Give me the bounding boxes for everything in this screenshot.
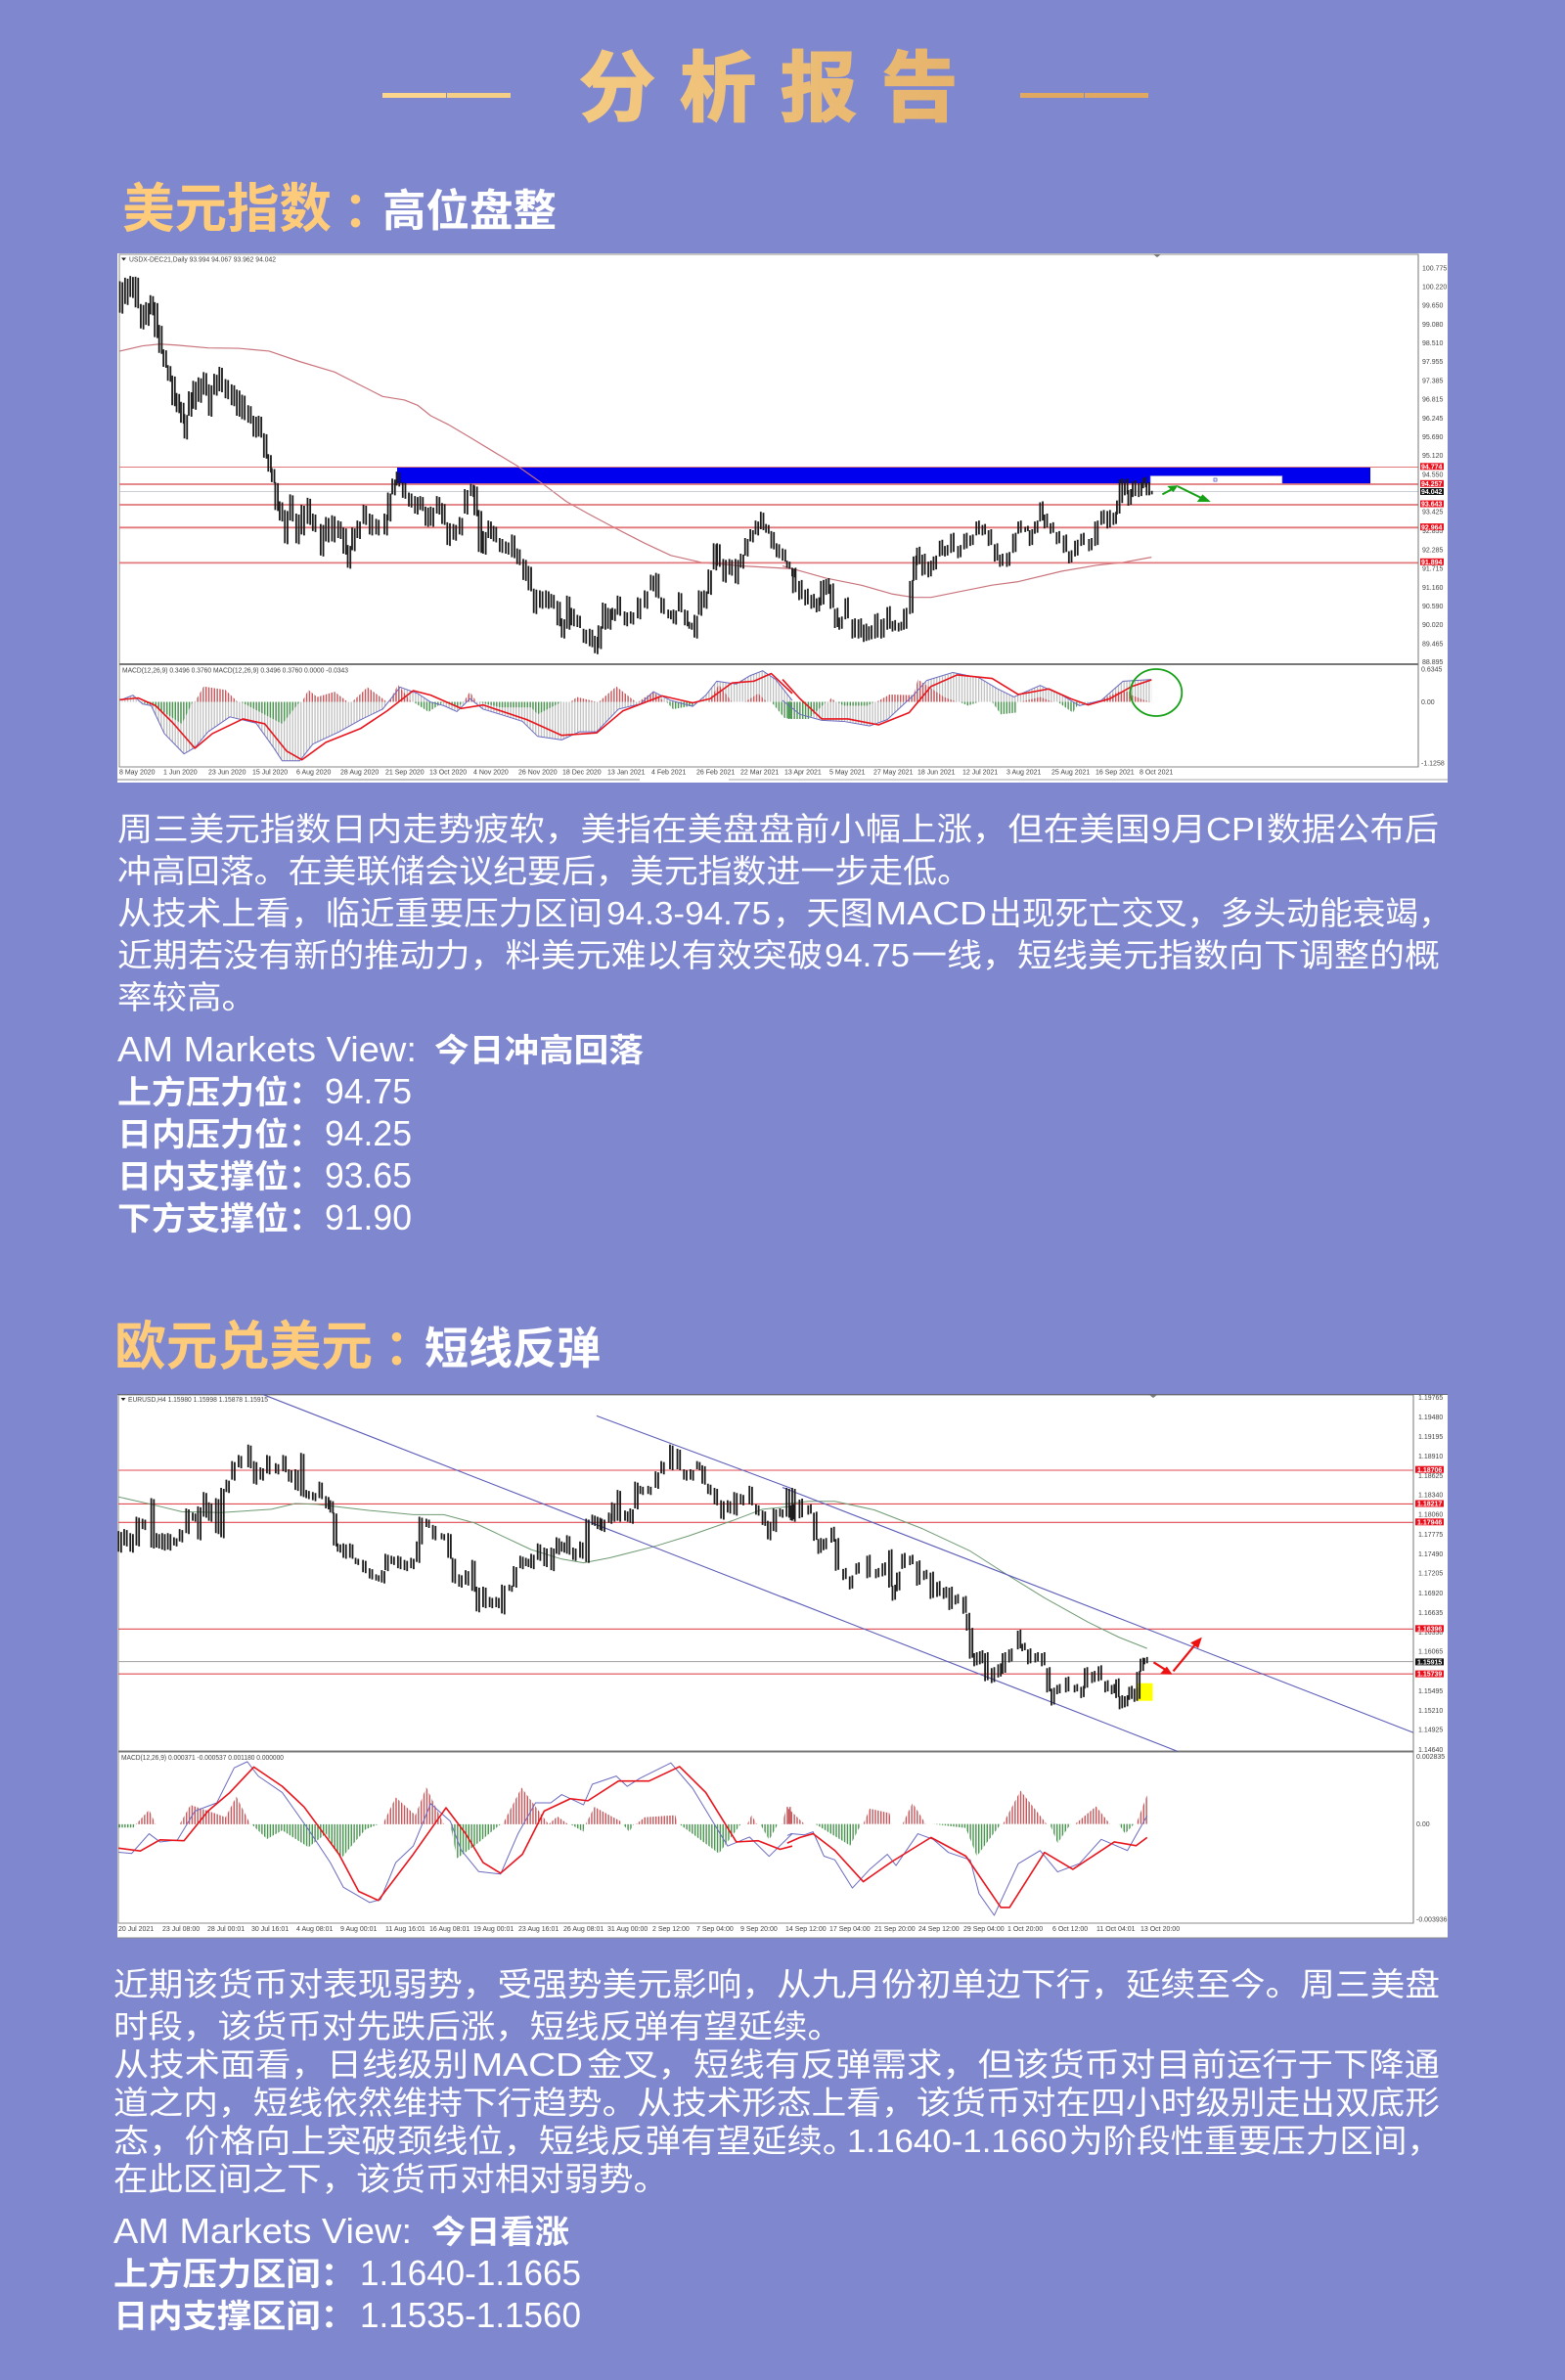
horizontal levels (118, 1470, 1413, 1674)
date axis: 3 Aug 2021 (1006, 769, 1042, 777)
date axis (117, 769, 1448, 780)
price axis: 1.18217 (1417, 1502, 1442, 1508)
price axis: 94.550 (1422, 472, 1444, 479)
text block: EURUSD analysis: 从技术面看，日线级别 (113, 2046, 469, 2083)
text block: EURUSD analysis (113, 1966, 1441, 2197)
text block: USDX view and levels: 日内压力位： (117, 1116, 323, 1152)
date axis: 12 Jul 2021 (962, 769, 998, 777)
price axis: 88.895 (1422, 659, 1444, 666)
text block: USDX view and levels: 93.65 (325, 1155, 412, 1195)
heading: 美元指数: 高位盘整 (382, 186, 557, 236)
price axis (1418, 254, 1447, 767)
price axis: 1.16396 (1417, 1626, 1442, 1633)
chart header text: EURUSD,H4 1.15980 1.15998 1.15878 1.15915 (128, 1397, 268, 1404)
date axis: 8 Oct 2021 (1140, 769, 1173, 777)
text block: EURUSD view and levels: AM Markets View: (113, 2211, 412, 2251)
moving average (119, 344, 1151, 598)
text block: USDX analysis: 94.3-94.75 (606, 895, 771, 931)
moving average (118, 1497, 1147, 1648)
date axis: 17 Sep 04:00 (829, 1926, 871, 1933)
title: 分析报告 (579, 45, 982, 131)
date axis: 11 Oct 04:01 (1096, 1926, 1136, 1933)
price axis: 1.18706 (1417, 1467, 1442, 1474)
date axis: 21 Sep 20:00 (874, 1926, 916, 1933)
price axis: 1.17490 (1418, 1551, 1443, 1558)
candlesticks (119, 276, 1152, 654)
price axis: 91.894 (1421, 560, 1443, 566)
date axis: 2 Sep 12:00 (652, 1926, 690, 1933)
date axis (118, 1926, 1180, 1933)
price axis: 1.17946 (1417, 1519, 1442, 1526)
date axis: 29 Sep 04:00 (963, 1926, 1005, 1933)
price axis: 95.120 (1422, 453, 1444, 460)
text block: EURUSD view and levels: 日内支撑区间： (113, 2298, 355, 2334)
date axis: 16 Sep 2021 (1096, 769, 1135, 777)
horizontal levels (119, 468, 1418, 562)
price axis: 1.14925 (1418, 1728, 1443, 1734)
heading: 美元指数: ： (343, 183, 392, 238)
price axis: 99.650 (1422, 303, 1444, 310)
trend channel (262, 1394, 1413, 1751)
text block: USDX analysis: ，天图 (773, 895, 873, 931)
MACD indicator: MACD(12,26,9) 0.3496 0.3760 MACD(12,26,9) 0.3496 0.3760 0.0000 -0.0343 (122, 667, 348, 675)
top marker (1153, 254, 1161, 257)
price axis: 89.465 (1422, 641, 1444, 648)
price axis: 1.19480 (1418, 1415, 1443, 1421)
text block: USDX view and levels: AM Markets View: (117, 1029, 417, 1069)
text block: USDX view and levels: 91.90 (325, 1197, 412, 1237)
date axis: 9 Sep 20:00 (740, 1926, 778, 1933)
date axis: 13 Oct 20:00 (1140, 1926, 1180, 1933)
text block: USDX analysis: 冲高回落。在美联储会议纪要后，美元指数进一步走低。 (117, 853, 971, 889)
price axis: 1.17205 (1418, 1571, 1443, 1578)
price axis: 92.285 (1422, 547, 1444, 554)
date axis: 6 Aug 2020 (296, 769, 332, 777)
date axis: 26 Feb 2021 (696, 769, 735, 777)
price axis: 1.16350 (1418, 1630, 1443, 1637)
icon: green circle (1131, 669, 1182, 716)
text block: EURUSD analysis: 时段，该货币对先跌后涨，短线反弹有望延续。 (113, 2008, 842, 2044)
candlesticks (118, 1445, 1147, 1709)
price axis: 97.385 (1422, 378, 1444, 384)
date axis: 31 Aug 00:00 (607, 1926, 648, 1933)
date axis: 1 Oct 20:00 (1007, 1926, 1043, 1933)
date axis: 4 Aug 08:01 (296, 1926, 333, 1933)
text block: EURUSD analysis: 近期该货币对表现弱势，受强势美元影响，从九月份初单边下行，延续至今。周三美盘 (113, 1966, 1440, 2002)
price axis: 96.815 (1422, 397, 1444, 404)
date axis: 22 Mar 2021 (740, 769, 779, 777)
date axis: 4 Nov 2020 (473, 769, 509, 777)
date axis: 20 Jul 2021 (118, 1926, 154, 1933)
text block: USDX view and levels: 日内支撑位： (117, 1158, 323, 1194)
price axis: 92.964 (1421, 524, 1443, 531)
date axis: 28 Aug 2020 (340, 769, 379, 777)
text block: EURUSD analysis: 为阶段性重要压力区间， (1069, 2123, 1441, 2159)
text block: EURUSD analysis: MACD (471, 2046, 583, 2083)
text block: EURUSD analysis: 金叉，短线有反弹需求，但该货币对目前运行于下降通 (587, 2046, 1440, 2083)
price axis: 1.16920 (1418, 1591, 1443, 1597)
MACD indicator (118, 1755, 1148, 1915)
date axis: 5 May 2021 (829, 769, 866, 777)
date axis: 18 Dec 2020 (562, 769, 602, 777)
date axis: 27 May 2021 (873, 769, 914, 777)
text block: EURUSD view and levels: 1.1640-1.1665 (360, 2253, 581, 2293)
price axis: 1.18910 (1418, 1454, 1443, 1460)
price axis: 1.17775 (1418, 1532, 1443, 1539)
price axis: 98.510 (1422, 340, 1444, 347)
text block: USDX view and levels: 下方支撑位： (117, 1200, 323, 1236)
price axis: 1.15739 (1417, 1672, 1442, 1679)
panel: USDX daily chart (117, 253, 1448, 783)
text block: EURUSD view and levels: 1.1535-1.1560 (360, 2295, 581, 2335)
price axis: 1.16635 (1418, 1610, 1443, 1617)
price axis: 1.18340 (1418, 1493, 1443, 1500)
date axis: 30 Jul 16:01 (251, 1926, 289, 1933)
text block: EURUSD analysis: 态，价格向上突破颈线位，短线反弹有望延续。 (113, 2123, 858, 2159)
heading: 欧元兑美元: 短线反弹 (425, 1324, 601, 1373)
heading: 美元指数: 美元指数 (122, 180, 332, 239)
chart header text: USDX-DEC21,Daily 93.994 94.067 93.962 94.042 (129, 256, 276, 264)
heading: 欧元兑美元: ： (384, 1321, 433, 1375)
MACD indicator: MACD(12,26,9) 0.000371 -0.000537 0.001180 0.000000 (121, 1755, 284, 1762)
price axis: 1.15495 (1418, 1688, 1443, 1695)
price axis: 0.00 (1416, 1821, 1430, 1828)
price axis: 0.00 (1421, 699, 1435, 706)
title (382, 45, 1148, 131)
price axis: 94.774 (1421, 464, 1443, 472)
date axis: 26 Aug 08:01 (563, 1926, 604, 1933)
date axis: 26 Nov 2020 (518, 769, 558, 777)
date axis: 13 Apr 2021 (784, 769, 822, 777)
date axis: 25 Aug 2021 (1051, 769, 1090, 777)
text block: USDX view and levels: 上方压力位： (117, 1074, 323, 1110)
text block: EURUSD view and levels (113, 2211, 581, 2335)
text block: USDX analysis: 9月CPI (1151, 811, 1265, 847)
date axis: 11 Aug 16:01 (385, 1926, 425, 1933)
price axis: 0.6345 (1421, 666, 1443, 673)
price axis: 100.775 (1422, 266, 1447, 272)
price axis: 1.15915 (1417, 1659, 1442, 1667)
date axis: 15 Jul 2020 (252, 769, 288, 777)
text block: USDX analysis: 出现死亡交叉，多头动能衰竭， (989, 895, 1452, 931)
text block: USDX analysis: 94.75 (825, 937, 910, 973)
text block: EURUSD analysis: 道之内，短线依然维持下行趋势。从技术形态上看，该货币对在四小时级别走出双底形 (113, 2085, 1440, 2121)
text block: USDX analysis: 一线，短线美元指数向下调整的概 (912, 937, 1440, 973)
heading: 欧元兑美元: 欧元兑美元 (114, 1318, 373, 1376)
date axis: 6 Oct 12:00 (1052, 1926, 1088, 1933)
heading: 欧元兑美元 (114, 1318, 601, 1376)
text block: EURUSD analysis: 在此区间之下，该货币对相对弱势。 (113, 2161, 668, 2197)
price axis: 95.690 (1422, 434, 1444, 441)
date axis: 1 Jun 2020 (163, 769, 198, 777)
text block: USDX analysis: 近期若没有新的推动力，料美元难以有效突破 (117, 937, 823, 973)
price axis: 92.855 (1422, 528, 1444, 535)
price axis: 99.080 (1422, 322, 1444, 329)
date axis: 28 Jul 00:01 (207, 1926, 245, 1933)
text block: USDX view and levels: 今日冲高回落 (434, 1032, 644, 1068)
price axis: -1.1258 (1421, 761, 1445, 767)
date axis: 23 Jun 2020 (208, 769, 246, 777)
price axis: 1.14640 (1418, 1747, 1443, 1754)
price axis: 1.16065 (1418, 1649, 1443, 1656)
price axis: 91.715 (1422, 566, 1444, 573)
price axis: 1.19195 (1418, 1434, 1443, 1441)
price axis: 90.590 (1422, 604, 1444, 610)
text block: USDX analysis: MACD (875, 895, 987, 931)
price axis: 1.19765 (1418, 1395, 1443, 1402)
price axis: 93.643 (1421, 502, 1443, 509)
date axis: 18 Jun 2021 (917, 769, 956, 777)
price axis: 0.002835 (1416, 1754, 1445, 1761)
text block: USDX analysis: 周三美元指数日内走势疲软，美指在美盘盘前小幅上涨，但在美国 (117, 811, 1150, 847)
yellow highlight (1137, 1684, 1152, 1701)
arrow: red forecast (1153, 1638, 1202, 1675)
price axis (1413, 1395, 1448, 1923)
date axis: 7 Sep 04:00 (696, 1926, 734, 1933)
text block: USDX view and levels (117, 1029, 644, 1237)
MACD indicator (119, 667, 1151, 761)
date axis: 4 Feb 2021 (651, 769, 687, 777)
price axis: 94.257 (1421, 481, 1443, 488)
price axis: 90.020 (1422, 622, 1444, 629)
price axis: -0.003936 (1416, 1916, 1448, 1923)
price axis: 1.18625 (1418, 1473, 1443, 1480)
text block: USDX view and levels: 94.75 (325, 1071, 412, 1111)
text block: USDX analysis: 数据公布后 (1267, 811, 1439, 847)
text block: USDX analysis (117, 811, 1452, 1015)
text block: EURUSD analysis: 1.1640-1.1660 (847, 2123, 1067, 2159)
date axis: 13 Jan 2021 (607, 769, 646, 777)
date axis: 24 Sep 12:00 (918, 1926, 960, 1933)
price axis: 97.955 (1422, 359, 1444, 366)
date axis: 21 Sep 2020 (385, 769, 425, 777)
price axis: 96.245 (1422, 416, 1444, 423)
arrow: green forecast (1162, 485, 1210, 502)
date axis: 19 Aug 00:01 (473, 1926, 514, 1933)
price axis: 1.18060 (1418, 1512, 1443, 1519)
text block: USDX analysis: 从技术上看，临近重要压力区间 (117, 895, 603, 931)
price axis: 94.042 (1421, 489, 1443, 496)
date axis: 8 May 2020 (119, 769, 156, 777)
panel: EURUSD H4 chart (117, 1394, 1448, 1938)
date axis: 23 Aug 16:01 (518, 1926, 559, 1933)
text block: EURUSD view and levels: 今日看涨 (431, 2214, 569, 2250)
price axis: 93.425 (1422, 510, 1444, 516)
price zone highlight (397, 468, 1370, 484)
top marker (1149, 1395, 1157, 1398)
price axis: 91.160 (1422, 585, 1444, 592)
price axis: 100.220 (1422, 284, 1447, 292)
date axis: 9 Aug 00:01 (340, 1926, 377, 1933)
date axis: 23 Jul 08:00 (162, 1926, 200, 1933)
text block: EURUSD view and levels: 上方压力区间： (113, 2256, 355, 2292)
date axis: 13 Oct 2020 (429, 769, 467, 777)
heading: 美元指数 (122, 180, 557, 239)
price axis: 1.15210 (1418, 1708, 1443, 1715)
text block: USDX view and levels: 94.25 (325, 1113, 412, 1153)
date axis: 16 Aug 08:01 (429, 1926, 470, 1933)
text block: USDX analysis: 率较高。 (117, 979, 256, 1015)
date axis: 14 Sep 12:00 (785, 1926, 827, 1933)
